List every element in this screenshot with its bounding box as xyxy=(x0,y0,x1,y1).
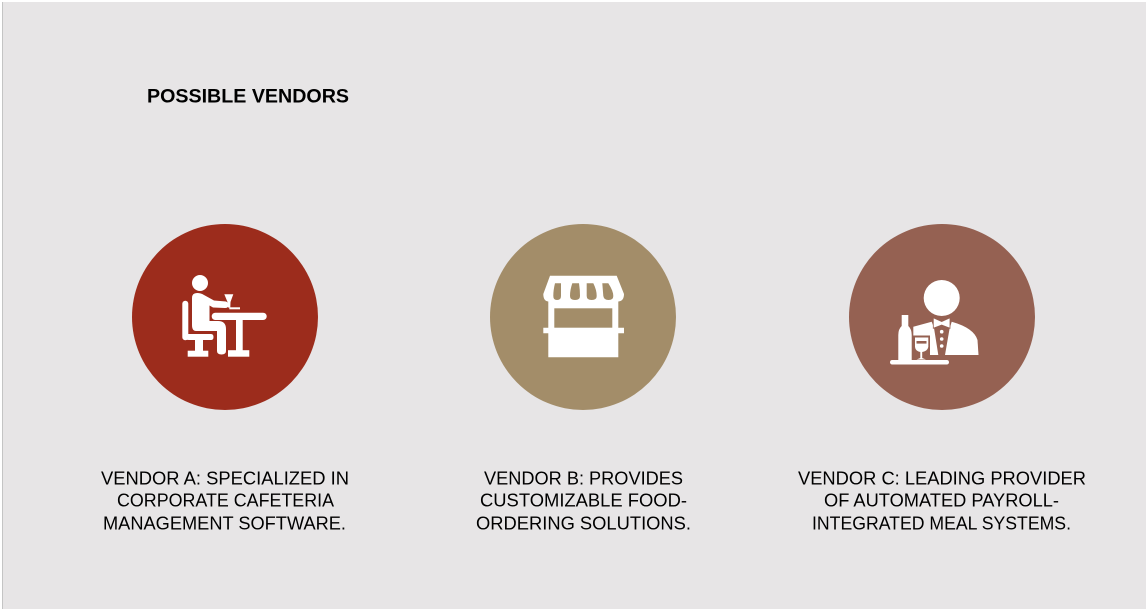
vendor C description: INTEGRATED MEAL SYSTEMS. xyxy=(812,514,1071,534)
vendor C description xyxy=(798,468,1086,534)
vendor A description: VENDOR A: SPECIALIZED IN xyxy=(101,468,349,488)
vendor C description: VENDOR C: LEADING PROVIDER xyxy=(798,468,1086,488)
vendor C description: OF AUTOMATED PAYROLL- xyxy=(824,490,1059,510)
vendor B circle with icon xyxy=(490,224,676,410)
vendor B description: CUSTOMIZABLE FOOD- xyxy=(480,490,687,510)
icon: market stall xyxy=(543,276,624,357)
vendor A description xyxy=(101,468,349,534)
vendor A description: MANAGEMENT SOFTWARE. xyxy=(103,514,346,534)
vendor B description xyxy=(476,468,691,534)
vendor A circle with icon xyxy=(132,224,318,410)
vendor C circle with icon xyxy=(849,224,1035,410)
vendor B description: VENDOR B: PROVIDES xyxy=(484,468,683,488)
icon: waiter with wine bottle xyxy=(890,280,978,364)
vendor A description: CORPORATE CAFETERIA xyxy=(117,490,334,510)
vendor B description: ORDERING SOLUTIONS. xyxy=(476,514,691,534)
icon: person seated at table xyxy=(182,275,267,357)
title: POSSIBLE VENDORS xyxy=(147,86,349,108)
